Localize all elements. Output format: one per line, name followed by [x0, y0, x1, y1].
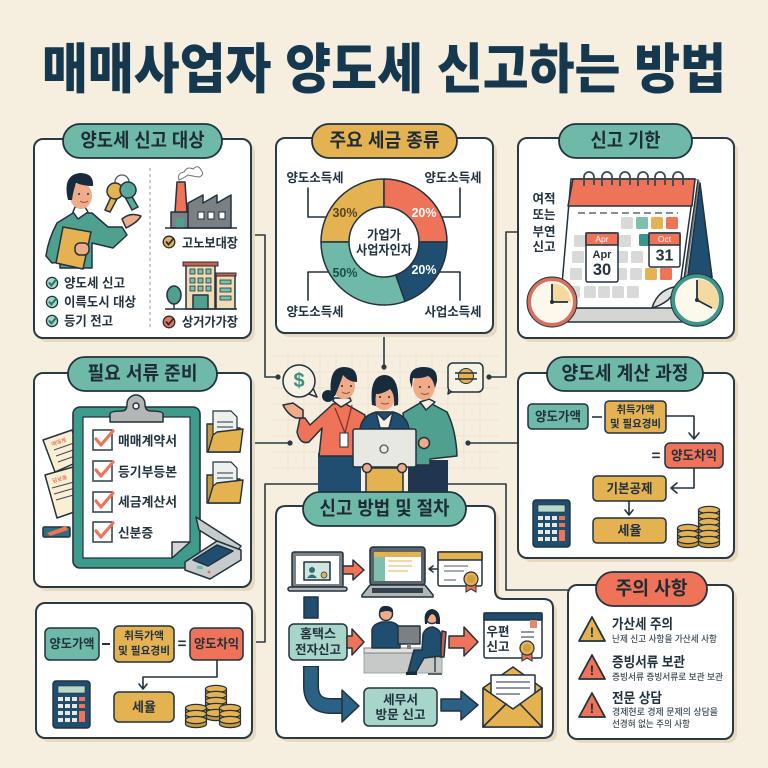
clipboard checklist: 신분증 — [118, 526, 153, 540]
side note — [532, 192, 556, 254]
box: 홈택스 전자신고: 홈택스 — [300, 627, 336, 641]
heading pill — [303, 492, 466, 526]
side note: 신고 — [532, 240, 556, 254]
leader lines and labels — [286, 171, 482, 319]
icon: commercial building — [165, 262, 237, 309]
leader lines and labels: 양도소득세 — [286, 305, 344, 319]
panel: 양도세 계산 과정: = — [652, 448, 661, 464]
icon: loose documents: 담보통 — [51, 473, 68, 485]
title: 매매사업자 양도세 신고하는 방법 — [42, 40, 726, 100]
icon: calculator — [533, 500, 570, 547]
icon: large laptop — [362, 547, 433, 597]
leader lines and labels: 양도소득세 — [424, 171, 482, 185]
icon: scanner — [185, 517, 241, 579]
donut chart: 20% — [411, 263, 437, 277]
date card: Oct 31 — [649, 233, 680, 267]
date card: Apr 30: Apr — [593, 249, 612, 261]
item: 전문 상담: ! — [590, 700, 594, 716]
donut chart — [321, 179, 447, 305]
flow: 양도가액: 양도가액 — [50, 636, 94, 651]
flow: 세율 — [593, 518, 666, 543]
clipboard checklist: 매매계약서 — [118, 434, 177, 448]
flow: 취득가액 및 필요경비: 및 필요경비 — [118, 644, 170, 657]
icon: folders — [207, 411, 243, 503]
label: 고노보대장: 고노보대장 — [182, 236, 238, 250]
donut chart: 30% — [332, 206, 358, 220]
item: 전문 상담: 경제현로 경제 문제의 상담을 — [612, 706, 718, 717]
checklist: 등기 전고 — [64, 314, 113, 328]
item: 증빙서류 보관: ! — [590, 662, 594, 678]
item: 전문 상담 — [579, 690, 718, 729]
arrow — [449, 627, 478, 656]
donut chart: 50% — [332, 266, 358, 280]
arrow — [671, 468, 694, 493]
heading pill: 양도세 계산 과정 — [562, 362, 688, 384]
item: 전문 상담: 전문 상담 — [612, 690, 662, 706]
date card: Oct 31: 31 — [656, 248, 674, 264]
heading pill — [312, 124, 457, 158]
heading pill: 신고 방법 및 절차 — [320, 498, 450, 520]
flow: 양도차익: 양도차익 — [671, 448, 717, 463]
panel: 계산 요약 — [36, 603, 256, 742]
heading pill — [63, 124, 222, 158]
flow: 기본공제 — [593, 476, 666, 501]
clipboard checklist — [73, 395, 200, 568]
side note: 여적 — [532, 192, 556, 206]
panel: 양도세 계산 과정 — [518, 357, 738, 562]
flow: 취득가액 및 필요경비: 및 필요경비 — [610, 417, 661, 430]
item: 증빙서류 보관: 증빙서류 보관 — [612, 654, 685, 670]
flow: 양도가액 — [45, 628, 99, 660]
heading pill — [559, 124, 692, 158]
people illustration — [283, 363, 483, 494]
flow: 기본공제: 기본공제 — [606, 481, 652, 496]
icon: stapler — [43, 526, 70, 537]
arrow — [139, 660, 217, 689]
checklist: 이륵도시 대상 — [64, 294, 136, 310]
card: 우편 신고 — [484, 613, 542, 661]
icon: dollar speech bubble — [283, 365, 317, 397]
icon: coin stacks — [186, 685, 240, 728]
flow: 양도차익 — [190, 628, 243, 660]
icon: dollar speech bubble: $ — [293, 370, 305, 392]
item: 가산세 주의: 난제 신고 사항을 가산세 사항 — [612, 633, 717, 644]
card: 우편 신고: 신고 — [486, 640, 510, 654]
flow: 양도차익: 양도차익 — [194, 637, 239, 651]
item: 가산세 주의: 가산세 주의 — [612, 616, 673, 632]
panel: 신고 방법 및 절차 — [276, 492, 557, 742]
person: right man — [403, 367, 457, 494]
checklist: 양도세 신고 — [64, 276, 125, 290]
date card: Oct 31: Oct — [658, 234, 672, 244]
leader lines and labels: 사업소득세 — [424, 305, 482, 319]
box: 홈택스 전자신고 — [289, 624, 347, 660]
card: 우편 신고: 우편 — [486, 625, 510, 639]
panel: 양도세 신고 대상 — [34, 124, 255, 342]
illustration: tax office counter — [364, 606, 446, 675]
item: 전문 상담: 선경혀 없는 주의 사항 — [612, 718, 690, 729]
date card: Apr 30: Apr — [595, 234, 609, 244]
label: 상거가가장: 상거가가장 — [182, 314, 238, 330]
box: 홈택스 전자신고: 전자신고 — [295, 643, 341, 657]
flow: 세율: 세율 — [132, 700, 156, 714]
panel: 신고 기한 — [518, 124, 738, 342]
flow: 세율: 세율 — [618, 523, 641, 538]
item: 증빙서류 보관 — [579, 654, 723, 682]
item: 가산세 주의 — [579, 616, 717, 644]
arrow: curved navy — [311, 666, 359, 722]
item: 가산세 주의: ! — [590, 624, 594, 640]
donut chart: 가업가 — [367, 228, 401, 242]
icon: small laptop — [288, 552, 347, 591]
flow: 취득가액 및 필요경비: 취득가액 — [616, 403, 654, 416]
leader lines and labels: 양도소득세 — [286, 171, 344, 185]
checklist — [46, 276, 136, 328]
heading pill: 필요 서류 준비 — [88, 362, 198, 384]
arrow — [429, 566, 438, 572]
flow: 양도가액 — [528, 404, 588, 429]
person: left woman — [283, 367, 365, 494]
heading pill — [68, 357, 217, 391]
icon: factory — [165, 167, 237, 228]
icon: loose documents — [43, 430, 82, 518]
donut chart: 20% — [411, 206, 437, 220]
heading pill: 주의 사항 — [616, 578, 688, 600]
clipboard checklist: 등기부등본 — [118, 464, 177, 480]
icon: coin stacks — [678, 506, 720, 548]
item: 증빙서류 보관: 증빙서류 증빙서류로 보관 보관 — [612, 671, 723, 682]
clipboard checklist: 세금계산서 — [118, 494, 177, 510]
connector lines — [251, 232, 570, 642]
icon: calculator — [53, 681, 90, 728]
icon: certificate — [438, 552, 482, 592]
person: center — [353, 375, 416, 494]
flow: 세율 — [114, 692, 174, 722]
donut chart: 사업자인자 — [356, 242, 412, 258]
flow: 양도가액: 양도가액 — [535, 409, 581, 424]
icon: envelope — [483, 667, 542, 727]
flow: 취득가액 및 필요경비 — [114, 626, 174, 662]
side note: 부연 — [532, 225, 556, 239]
arrow — [441, 691, 478, 720]
heading pill: 양도세 신고 대상 — [80, 130, 204, 152]
panel: 계산 요약: = — [178, 636, 187, 652]
icon: loose documents: 매매계 — [50, 436, 67, 448]
panel: 주의 사항 — [568, 572, 737, 743]
arrow — [666, 416, 699, 439]
flow: 취득가액 및 필요경비: 취득가액 — [124, 629, 164, 642]
icon: man holding keys — [46, 173, 141, 269]
panel: 주요 세금 종류 — [276, 124, 497, 337]
box: 세무서 방문 신고 — [364, 688, 437, 726]
flow: 양도차익 — [665, 443, 723, 468]
heading pill: 주요 세금 종류 — [330, 130, 440, 152]
heading pill: 신고 기한 — [590, 130, 660, 152]
icon: desk calendar — [560, 172, 712, 322]
flow: 취득가액 및 필요경비 — [605, 401, 666, 433]
box: 세무서 방문 신고: 세무서 — [383, 693, 418, 707]
heading pill — [547, 357, 703, 391]
side note: 또는 — [532, 208, 556, 222]
icon: clock left — [527, 277, 577, 327]
date card: Apr 30: 30 — [593, 261, 611, 279]
panel: 필요 서류 준비 — [34, 357, 255, 591]
arrow — [343, 560, 364, 580]
heading pill — [596, 572, 707, 606]
arrow — [625, 501, 633, 515]
arrow — [347, 629, 364, 655]
date card: Apr 30 — [586, 233, 618, 282]
box: 세무서 방문 신고: 방문 신고 — [376, 708, 426, 722]
icon: clock right — [671, 274, 723, 326]
icon: coin speech bubble — [448, 363, 483, 394]
arrow: navy connector — [304, 597, 318, 618]
